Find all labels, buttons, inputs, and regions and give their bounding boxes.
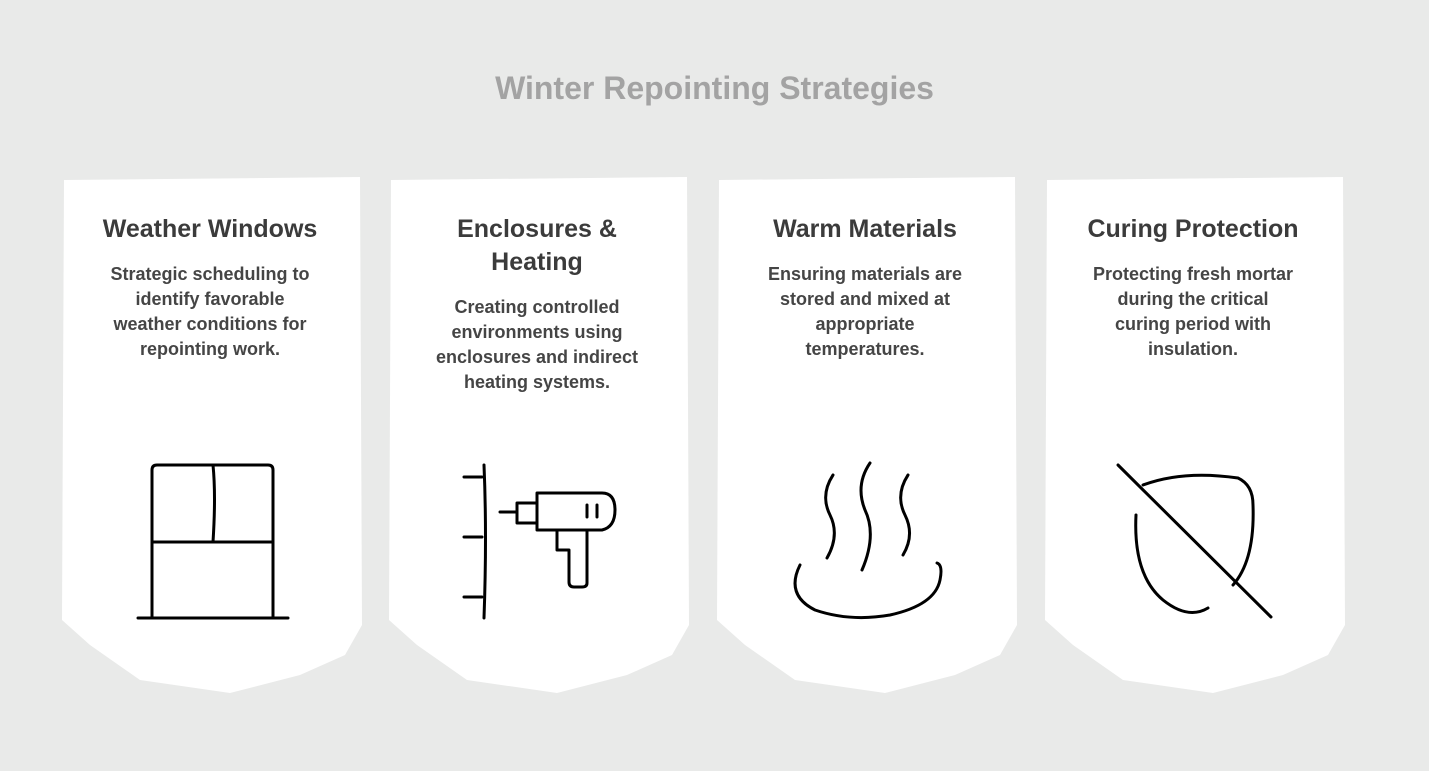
icon: shield slash (1116, 463, 1273, 619)
title: Winter Repointing Strategies (495, 70, 934, 106)
icon: window (136, 464, 290, 620)
panel: warm materials (717, 177, 1017, 693)
icon: steam (794, 461, 942, 620)
panel: weather windows (62, 177, 362, 693)
panel: enclosures & heating (389, 177, 689, 693)
icon: heater gun (462, 464, 616, 620)
text: Protecting fresh mortar during the critical curing period with insulation. (1093, 264, 1293, 359)
text: Strategic scheduling to identify favorable weather conditions for repointing work. (110, 264, 310, 359)
heading: Enclosures & Heating (457, 215, 617, 276)
text: Creating controlled environments using enclosures and indirect heating systems. (436, 297, 638, 392)
heading: Warm Materials (773, 215, 957, 243)
text: Ensuring materials are stored and mixed at appropriate temperatures. (768, 264, 962, 359)
heading: Weather Windows (103, 215, 317, 243)
heading: Curing Protection (1087, 215, 1299, 243)
panel: curing protection (1045, 177, 1345, 693)
